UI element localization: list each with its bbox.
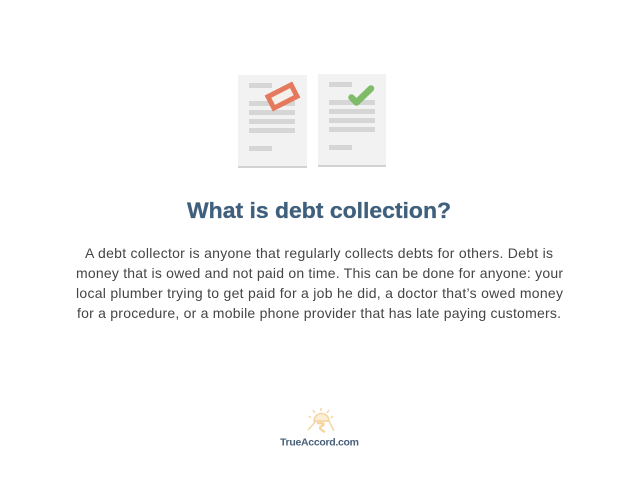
icon: sun and road [308, 408, 334, 432]
body text: local plumber trying to get paid for a job he did, a doctor that’s owed money [76, 285, 563, 301]
logo: TrueAccord [280, 408, 359, 448]
icon: document with rejected stamp [238, 75, 307, 168]
title: What is debt collection? [187, 198, 451, 223]
logo wordmark: TrueAccord.com [280, 436, 359, 448]
icon: document with check mark [318, 74, 386, 167]
icon: green check [352, 88, 371, 102]
icon: red stamp [268, 85, 297, 108]
body text: money that is owed and not paid on time. This can be done for anyone: your [76, 265, 563, 281]
body text [76, 245, 563, 321]
body text: for a procedure, or a mobile phone provider that has late paying customers. [77, 305, 561, 321]
body text: A debt collector is anyone that regularly collects debts for others. Debt is [85, 245, 553, 261]
